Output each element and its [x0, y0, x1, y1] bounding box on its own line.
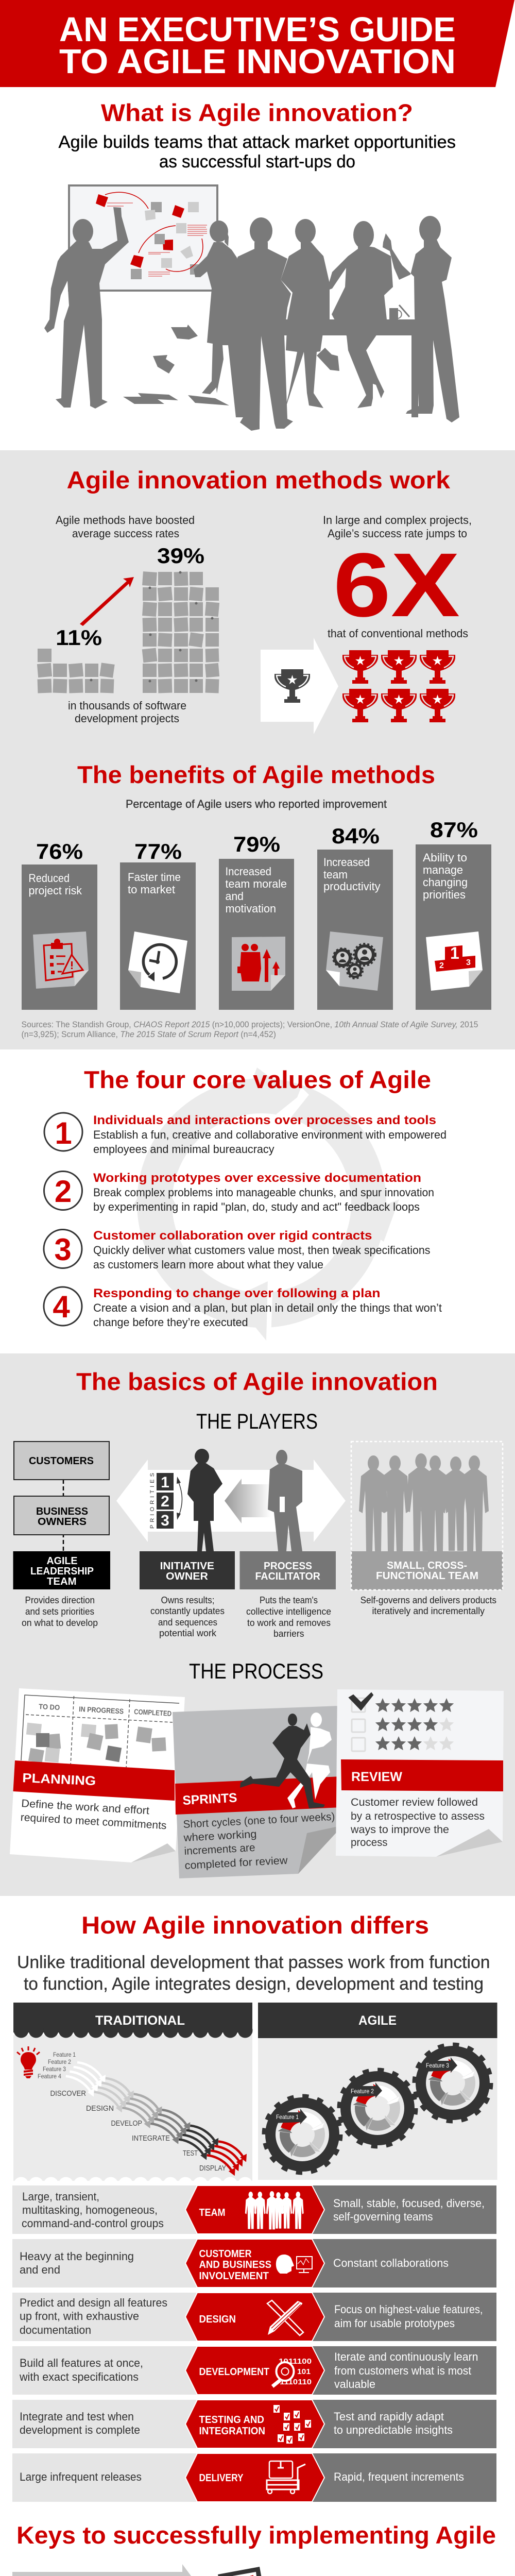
row: testing and integration: TESTING AND	[199, 2414, 264, 2426]
note: sprints: SPRINTS	[182, 1790, 237, 1808]
icon: agile document	[218, 2567, 265, 2576]
text: waterfall stages: DISCOVER	[50, 2089, 86, 2098]
note: sprints: completed for review	[184, 1855, 288, 1872]
chart: 76 percent reduced risk: Reduced	[29, 872, 70, 885]
row: design: aim for usable prototypes	[334, 2317, 455, 2330]
note: planning: required to meet commitments	[20, 1811, 167, 1832]
value 4: change before they’re executed	[93, 1316, 248, 1329]
header: agile: AGILE	[358, 2013, 397, 2028]
row: team: Large, transient,	[22, 2190, 99, 2203]
note: review: Customer review followed	[351, 1797, 478, 1808]
row: testing and integration	[12, 2400, 496, 2448]
value 4: 4	[53, 1290, 70, 1324]
box: small cross-functional team: SMALL, CROSS-	[387, 1560, 467, 1571]
list: priorities: 3	[161, 1512, 169, 1529]
list: priorities: 1	[161, 1474, 169, 1491]
text: leadership team role: on what to develop	[22, 1617, 98, 1628]
note: review: REVIEW	[351, 1770, 402, 1784]
box: process facilitator	[240, 1551, 336, 1589]
note: review: by a retrospective to assess	[351, 1810, 485, 1822]
text: waterfall stages: TEST	[183, 2149, 198, 2158]
row: team: TEAM	[199, 2207, 226, 2218]
row: testing and integration: Test and rapidly adapt	[334, 2410, 444, 2423]
value 1: Establish a fun, creative and collaborative environment with empowered	[93, 1128, 447, 1141]
icon: team silhouettes	[245, 2191, 304, 2229]
value 1: 1	[55, 1116, 72, 1150]
text: process facilitator role: Puts the team's	[260, 1595, 318, 1605]
text: boosted success rates: average success rates	[72, 527, 179, 540]
chart: 87 percent priorities: 87%	[430, 818, 478, 842]
row: customer and business involvement: CUSTOMER	[199, 2248, 252, 2260]
box: initiative owner: INITIATIVE	[160, 1561, 214, 1572]
text: features	[38, 2051, 76, 2080]
text: waterfall stages: DESIGN	[86, 2104, 114, 2113]
chart: waterfall arrows	[66, 2062, 247, 2176]
row: development: Iterate and continuously learn	[334, 2350, 478, 2363]
chart: 84 percent productivity: productivity	[323, 880, 380, 893]
chart: 84 percent productivity: 84%	[332, 824, 380, 848]
chart: 77 percent faster time: to market	[128, 883, 175, 896]
value 4: Responding to change over following a plan	[93, 1286, 380, 1300]
icon: checked notes	[273, 2405, 311, 2444]
icon: ruler and pencil	[267, 2300, 303, 2335]
row: delivery: Large infrequent releases	[20, 2470, 142, 2483]
text: initiative owner role: potential work	[159, 1628, 217, 1638]
note: review: process	[351, 1837, 387, 1849]
header: agile	[258, 2003, 497, 2038]
row: customer and business involvement: and end	[20, 2263, 60, 2276]
chart: 79 percent morale: 79%	[233, 832, 280, 856]
icon: light bulb	[17, 2046, 40, 2078]
flying papers	[123, 325, 339, 405]
row: development: DEVELOPMENT	[199, 2366, 269, 2378]
box: agile leadership team	[13, 1551, 110, 1589]
text: sources: Sources: The Standish Group, CHAOS Report 2015 (n>10,000 projects); VersionOne, 10th Annual State of Agile Survey, 2015	[22, 1020, 478, 1029]
icon: team with rising arrows	[232, 937, 285, 991]
icon: binary magnifier	[272, 2357, 312, 2386]
chart: 79 percent morale: Increased	[226, 865, 271, 878]
box: agile leadership team: LEADERSHIP	[30, 1566, 94, 1577]
icon: single trophy	[274, 669, 310, 703]
heading: four core values: The four core values of Agile	[84, 1066, 431, 1093]
box: small cross-functional team: FUNCTIONAL TEAM	[376, 1570, 478, 1582]
row: testing and integration: development is complete	[20, 2424, 140, 2436]
chart: 77 percent faster time: 77%	[134, 839, 182, 863]
heading: benefits: The benefits of Agile methods	[77, 761, 435, 788]
chart: 76 percent reduced risk: 76%	[36, 839, 83, 863]
value 2	[44, 1171, 434, 1213]
text: sources	[22, 1020, 478, 1039]
row: testing and integration: INTEGRATION	[199, 2426, 265, 2437]
icon: podium: 3	[466, 958, 471, 967]
list: priorities: 2	[161, 1493, 169, 1510]
row: customer and business involvement	[12, 2239, 496, 2287]
value 2: Working prototypes over excessive documentation	[93, 1171, 421, 1185]
text: process facilitator role: barriers	[273, 1628, 304, 1639]
text: process facilitator role: collective intelligence	[246, 1606, 331, 1617]
chart: 76 percent reduced risk: project risk	[29, 884, 82, 897]
heading: the process: THE PROCESS	[189, 1659, 323, 1683]
silhouette: cross-functional team	[359, 1453, 489, 1551]
icon: customer with monitor	[276, 2255, 312, 2274]
icon: gear feature 2: Feature 2	[351, 2088, 374, 2095]
text: team role: Self-governs and delivers products	[360, 1595, 496, 1605]
list: priorities	[149, 1473, 182, 1529]
row: team	[12, 2185, 496, 2234]
chart: sticky notes 11 percent	[37, 649, 115, 693]
icon: gear feature 1: Feature 1	[276, 2113, 299, 2121]
box: agile leadership team: AGILE	[46, 1555, 77, 1567]
key 1: stay true	[12, 2564, 484, 2576]
text: conventional methods: that of conventional methods	[328, 627, 468, 640]
chart: 87 percent priorities: manage	[423, 863, 463, 876]
value 2: by experimenting in rapid "plan, do, study and act" feedback loops	[93, 1200, 420, 1213]
text: leadership team role	[22, 1595, 98, 1628]
text: sources: (n=3,925); Scrum Alliance, The 2015 State of Scrum Report (n=4,452)	[22, 1029, 276, 1039]
row: development: with exact specifications	[19, 2370, 139, 2383]
box: initiative owner	[140, 1551, 235, 1589]
row: design: Focus on highest-value features,	[334, 2303, 483, 2316]
board: kanban: COMPLETED	[134, 1707, 172, 1718]
whiteboard	[69, 185, 217, 291]
row: development: from customers what is most	[334, 2364, 471, 2377]
box: process facilitator: FACILITATOR	[255, 1571, 321, 1582]
row: delivery: Rapid, frequent increments	[334, 2470, 464, 2483]
background: cycle arrows	[131, 1067, 399, 1341]
note: sprints: where working	[183, 1828, 257, 1844]
value 4	[44, 1286, 442, 1329]
icon: binary magnifier: 101	[297, 2367, 311, 2376]
icon: binary magnifier: 1011100	[279, 2357, 312, 2366]
row: development: Build all features at once,	[20, 2357, 143, 2369]
board: kanban	[21, 1695, 179, 1768]
heading: basics: The basics of Agile innovation	[76, 1368, 438, 1395]
row: team: command-and-control groups	[22, 2217, 164, 2230]
panel: agile methods work	[0, 450, 515, 1049]
row: design	[12, 2293, 496, 2341]
heading: methods work: Agile innovation methods work	[67, 466, 451, 494]
heading: what is agile: What is Agile innovation?	[101, 99, 413, 126]
text: in thousands of projects: in thousands of software	[68, 699, 186, 712]
text: in thousands of projects: development projects	[75, 712, 179, 725]
chart: sticky notes 39 percent	[142, 571, 219, 693]
icon: podium: 1	[450, 944, 459, 962]
icon: runners	[240, 1713, 332, 1808]
value 3: Quickly deliver what customers value most, then tweak specifications	[93, 1244, 431, 1257]
icon: gear feature 3: Feature 3	[426, 2062, 449, 2069]
note: review: ways to improve the	[350, 1824, 449, 1836]
board: kanban: IN PROGRESS	[79, 1705, 124, 1716]
chart: 87 percent priorities: priorities	[423, 888, 466, 901]
heading: the players: THE PLAYERS	[196, 1409, 318, 1433]
text: team role: iteratively and incrementally	[372, 1605, 485, 1616]
box: customers	[14, 1442, 109, 1480]
text: features: Feature 2	[48, 2058, 71, 2065]
chart: 84 percent productivity: Increased	[323, 856, 370, 869]
value 1: Individuals and interactions over processes and tools	[93, 1113, 436, 1127]
row: customer and business involvement: Constant collaborations	[333, 2257, 449, 2269]
box: agile leadership team: TEAM	[47, 1576, 77, 1587]
arrow: rising success	[80, 577, 134, 626]
text: process facilitator role	[246, 1595, 331, 1639]
value 3: Customer collaboration over rigid contracts	[93, 1229, 372, 1243]
chart: 79 percent morale: team morale	[226, 877, 287, 890]
banner: title: AN EXECUTIVE’S GUIDE	[59, 10, 456, 49]
value 3: 3	[54, 1232, 72, 1267]
text: waterfall stages: INTEGRATE	[132, 2134, 170, 2143]
icon: clipboard warning	[33, 931, 89, 989]
text: leadership team role: and sets priorities	[25, 1606, 94, 1617]
row: delivery: DELIVERY	[199, 2472, 244, 2484]
number: 39 percent: 39%	[157, 544, 204, 568]
row: design: DESIGN	[199, 2314, 236, 2325]
box: customers: CUSTOMERS	[29, 1455, 94, 1467]
text: boosted success rates	[56, 514, 195, 540]
text: boosted success rates: Agile methods have boosted	[56, 514, 195, 527]
text: waterfall stages: DISPLAY	[199, 2164, 226, 2173]
text: initiative owner role: Owns results;	[161, 1595, 214, 1605]
subheading: unlike traditional: Unlike traditional development that passes work from function	[17, 1953, 490, 1972]
subheading: percentage of users: Percentage of Agile users who reported improvement	[126, 798, 387, 810]
row: development	[12, 2346, 496, 2395]
rating: stars and checkboxes	[349, 1693, 454, 1751]
value 1: employees and minimal bureaucracy	[93, 1143, 274, 1156]
row: delivery	[12, 2453, 496, 2502]
text: in thousands of projects	[68, 699, 186, 725]
chart: 77 percent faster time: Faster time	[128, 871, 181, 884]
people silhouettes	[44, 207, 459, 431]
text: initiative owner role: and sequences	[158, 1617, 217, 1628]
note: sprints	[173, 1706, 343, 1878]
row: design: documentation	[20, 2324, 91, 2336]
text: waterfall stages	[50, 2089, 226, 2173]
row: customer and business involvement: Heavy at the beginning	[20, 2250, 134, 2263]
row: development: valuable	[334, 2378, 375, 2391]
list: priorities: PRIORITIES	[149, 1473, 156, 1529]
subheading: agile definition: Agile builds teams that attack market opportunities	[59, 132, 456, 152]
row: design: Predict and design all features	[20, 2296, 167, 2309]
icon: delivery cart	[267, 2461, 305, 2494]
arrow: white conversion arrow	[261, 638, 338, 734]
value 3: as customers learn more about what they value	[93, 1258, 323, 1271]
header: traditional	[13, 2003, 252, 2038]
text: large complex projects	[323, 514, 472, 540]
note: review	[336, 1689, 504, 1857]
row: design: up front, with exhaustive	[20, 2310, 139, 2323]
text: features: Feature 3	[43, 2065, 66, 2073]
chart: 87 percent priorities: Ability to	[423, 851, 467, 864]
row: customer and business involvement: INVOLVEMENT	[199, 2270, 269, 2282]
banner: title: TO AGILE INNOVATION	[59, 42, 456, 81]
silhouette: process facilitator	[268, 1450, 302, 1551]
number: 11 percent: 11%	[56, 625, 102, 650]
subheading: agile definition: as successful start-ups do	[159, 152, 355, 172]
box: small cross-functional team	[351, 1442, 503, 1590]
chart: 84 percent productivity: team	[323, 868, 348, 881]
chart: 77 percent faster time	[120, 839, 196, 1010]
note: sprints: Short cycles (one to four weeks)	[183, 1811, 335, 1831]
panel: agile	[258, 2003, 497, 2180]
header: traditional: TRADITIONAL	[95, 2013, 185, 2028]
chart: 76 percent reduced risk	[22, 839, 97, 1010]
value 4: Create a vision and a plan, but plan in detail only the things that won’t	[93, 1301, 442, 1314]
value 2: Break complex problems into manageable chunks, and spur innovation	[93, 1186, 434, 1199]
box: initiative owner: OWNER	[166, 1571, 209, 1582]
board: kanban: TO DO	[39, 1702, 60, 1711]
icon: gear feature 2	[340, 2071, 415, 2146]
subheading: unlike traditional: to function, Agile integrates design, development and testing	[24, 1974, 484, 1994]
icon: gear feature 3	[415, 2045, 490, 2121]
text: process facilitator role: to work and removes	[247, 1617, 331, 1628]
row: testing and integration: Integrate and test when	[20, 2410, 134, 2423]
box: business owners: OWNERS	[38, 1516, 87, 1528]
text: large complex projects: In large and complex projects,	[323, 514, 472, 527]
text: large complex projects: Agile’s success rate jumps to	[328, 527, 467, 540]
text: leadership team role: Provides direction	[25, 1595, 95, 1605]
box: business owners	[14, 1496, 109, 1535]
dashed connector	[63, 1480, 64, 1551]
row: team: self-governing teams	[333, 2210, 433, 2223]
chart: 79 percent morale	[219, 832, 294, 1010]
text: waterfall stages: DEVELOP	[111, 2119, 142, 2128]
icon: podium	[426, 931, 483, 991]
heading: keys: Keys to successfully implementing Agile	[16, 2521, 496, 2549]
value 1	[44, 1113, 447, 1156]
row: team: Small, stable, focused, diverse,	[333, 2197, 485, 2210]
row: customer and business involvement: AND BUSINESS	[199, 2259, 271, 2270]
chart: 79 percent morale: and	[226, 890, 244, 903]
value 2: 2	[55, 1174, 72, 1209]
text: team role	[360, 1595, 496, 1616]
subheading: agile definition	[59, 132, 456, 172]
subheading: unlike traditional	[17, 1953, 490, 1994]
silhouette: initiative owner	[187, 1449, 222, 1551]
row: testing and integration: to unpredictable insights	[334, 2424, 453, 2436]
note: sprints: increments are	[184, 1842, 255, 1857]
text: features: Feature 4	[38, 2073, 61, 2080]
text: features: Feature 1	[53, 2051, 76, 2058]
chart: 87 percent priorities	[416, 818, 491, 1010]
note: planning	[10, 1688, 185, 1862]
value 3	[44, 1229, 431, 1271]
arrow: two-way white	[116, 1460, 346, 1542]
row: team: multitasking, homogeneous,	[22, 2204, 158, 2216]
chart: 87 percent priorities: changing	[423, 876, 468, 889]
box: process facilitator: PROCESS	[264, 1561, 312, 1572]
panel: basics of agile	[0, 1353, 515, 1896]
note: planning: Define the work and effort	[21, 1798, 150, 1817]
icon: six trophies	[342, 650, 455, 722]
arrow: gray feedback	[225, 1479, 271, 1523]
panel: traditional	[13, 2003, 252, 2192]
heading: how agile differs: How Agile innovation differs	[81, 1911, 429, 1939]
icon: gear feature 1	[265, 2097, 340, 2172]
icon: podium: 2	[439, 961, 444, 970]
note: planning: PLANNING	[22, 1771, 96, 1788]
icon: clock	[128, 931, 187, 993]
banner: title	[0, 0, 514, 87]
text: initiative owner role: constantly updates	[150, 1605, 225, 1616]
text: initiative owner role	[150, 1595, 225, 1638]
chart: 79 percent morale: motivation	[226, 902, 276, 915]
number: 6X: 6X	[333, 535, 460, 636]
icon: binary magnifier: 1110110	[280, 2378, 312, 2386]
chart: 84 percent productivity	[317, 824, 393, 1010]
box: business owners: BUSINESS	[36, 1506, 88, 1517]
icon: gears	[326, 931, 383, 991]
illustration: team at whiteboard	[44, 185, 459, 431]
